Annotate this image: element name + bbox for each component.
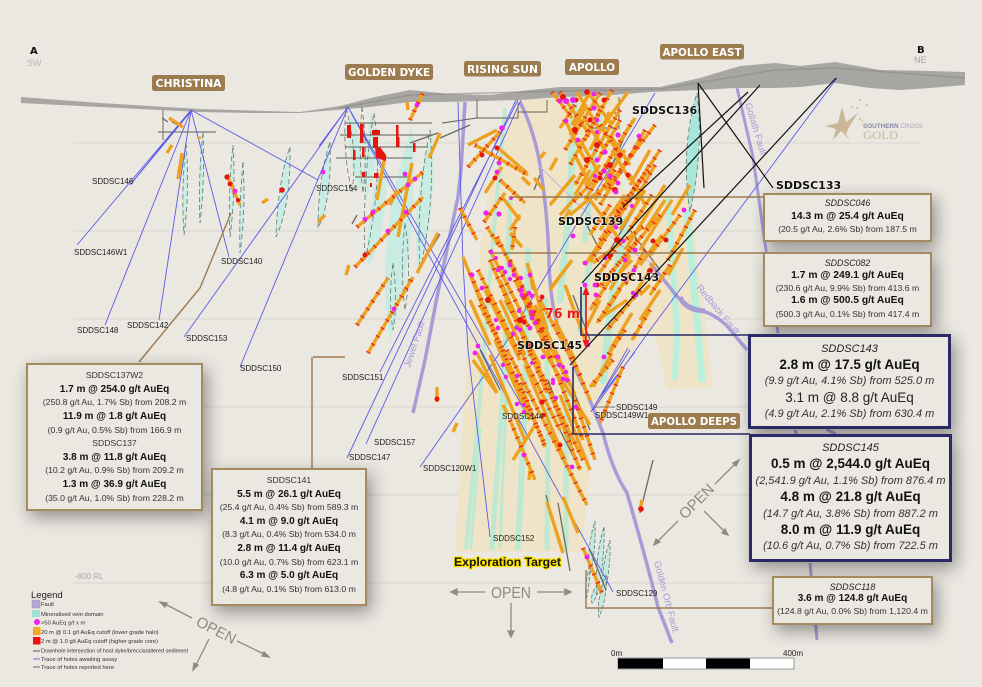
small drill hole labels: SDDSC140: [221, 257, 263, 266]
callout: SDDSC141: 5.5 m @ 26.1 g/t AuEq: [237, 489, 341, 500]
exploration target label: Exploration Target: [454, 555, 561, 569]
callout: SDDSC137W2 and SDDSC137: (10.2 g/t Au, 0.9% Sb) from 209.2 m: [45, 465, 184, 475]
legend: >50 AuEq g/t x m: [41, 620, 85, 626]
legend: Legend: [31, 590, 63, 601]
logo: Southern Cross Gold: [825, 99, 924, 142]
callout: SDDSC141: 2.8 m @ 11.4 g/t AuEq: [237, 543, 341, 554]
surface topography: [21, 62, 965, 113]
scale bar: [611, 649, 803, 669]
callout: SDDSC137W2 and SDDSC137: (250.8 g/t Au, 1.7% Sb) from 208.2 m: [43, 397, 186, 407]
bold drill hole labels: SDDSC136: [632, 104, 697, 117]
callout: SDDSC046: SDDSC046: [825, 198, 870, 208]
tag: Rising Sun: RISING SUN: [467, 64, 538, 76]
callout: SDDSC141: [211, 468, 367, 606]
faults: [413, 88, 836, 643]
callout: SDDSC143: SDDSC143: [821, 343, 878, 355]
open arrows: right: [654, 460, 739, 545]
bold drill hole labels: [517, 104, 841, 352]
legend: 2 m @ 1.0 g/t AuEq cutoff (higher grade core): [41, 639, 158, 645]
callout: SDDSC137W2 and SDDSC137: 1.3 m @ 36.9 g/t AuEq: [63, 479, 166, 490]
open arrows: centre: OPEN: [491, 585, 531, 602]
callout: SDDSC143: 2.8 m @ 17.5 g/t AuEq: [779, 357, 920, 372]
drill traces: thin grey collar lines: [158, 97, 620, 177]
open arrows: right: OPEN: [676, 481, 718, 523]
downhole intersection grey traces: [162, 118, 660, 590]
small drill hole labels: SDDSC146W1: [74, 248, 128, 257]
mineralised vein domains: Christina and Golden Dyke: [183, 93, 699, 330]
section ends A and B: SW: [27, 58, 42, 68]
callout: SDDSC137W2 and SDDSC137: SDDSC137: [92, 438, 137, 448]
small drill hole labels: SDDSC146: [92, 177, 134, 186]
small drill hole labels: [74, 177, 658, 598]
small drill hole labels: SDDSC149: [616, 403, 658, 412]
callout: SDDSC145: (14.7 g/t Au, 3.8% Sb) from 887.2 m: [763, 508, 938, 520]
pale vein domains: Golden Dyke: [349, 110, 433, 342]
redback fault: [650, 263, 747, 350]
callout: SDDSC137W2 and SDDSC137: 1.7 m @ 254.0 g/t AuEq: [60, 384, 169, 395]
fault labels: Golden Orb Fault: [651, 560, 681, 634]
deep vein domain cluster: [586, 521, 610, 617]
callout: SDDSC145: (2,541.9 g/t Au, 1.1% Sb) from 876.4 m: [756, 475, 945, 487]
tag: Apollo: APOLLO: [569, 62, 615, 74]
legend: Mineralised vein domain: [41, 612, 104, 618]
zone tags: [152, 44, 744, 429]
section ends A and B: [27, 45, 927, 68]
bold drill hole labels: SDDSC143: [594, 271, 659, 284]
callout: SDDSC137W2 and SDDSC137: 11.9 m @ 1.8 g/t AuEq: [63, 411, 166, 422]
tag: Golden Dyke: GOLDEN DYKE: [348, 67, 430, 79]
tag: Apollo: [565, 59, 619, 75]
open arrows: centre: [451, 585, 571, 637]
small drill hole labels: SDDSC151: [342, 373, 384, 382]
callout: SDDSC145: 0.5 m @ 2,544.0 g/t AuEq: [771, 456, 930, 471]
mineralised mint streaks: [466, 100, 625, 548]
callout: SDDSC141: 6.3 m @ 5.0 g/t AuEq: [240, 570, 338, 581]
small drill hole labels: SDDSC120W1: [423, 464, 477, 473]
callout: SDDSC141: SDDSC141: [267, 475, 311, 485]
bold drill hole labels: SDDSC139: [558, 215, 623, 228]
small drill hole labels: SDDSC153: [186, 334, 228, 343]
small drill hole labels: SDDSC154: [316, 184, 358, 193]
callout: SDDSC046: (20.5 g/t Au, 2.6% Sb) from 187.5 m: [778, 224, 917, 234]
legend: Trace of holes awaiting assay: [41, 657, 117, 663]
tag: Christina: [152, 75, 225, 91]
callout: SDDSC145: [749, 434, 952, 562]
logo: Southern Cross Gold: GOLD: [863, 128, 898, 142]
tag: Apollo East: APOLLO EAST: [662, 47, 742, 59]
legend: Trace of holes reported here: [41, 665, 114, 671]
fault labels: Goliath Fault: [742, 102, 769, 157]
callout: SDDSC143: [748, 334, 951, 429]
small drill hole labels: SDDSC129: [616, 589, 658, 598]
callout: SDDSC137W2 and SDDSC137: (0.9 g/t Au, 0.5% Sb) from 166.9 m: [48, 425, 181, 435]
callout: SDDSC143: 3.1 m @ 8.8 g/t AuEq: [785, 390, 914, 405]
minor fault: [538, 165, 650, 262]
section ends A and B: A: [30, 46, 38, 57]
small drill hole labels: SDDSC148: [77, 326, 119, 335]
small drill hole labels: SDDSC152: [493, 534, 535, 543]
holes awaiting assay: blue traces: [77, 78, 837, 592]
callout: SDDSC046: [763, 193, 932, 242]
high grade red blobs: [224, 89, 668, 512]
legend: Fault: [41, 602, 54, 608]
callout: SDDSC145: 4.8 m @ 21.8 g/t AuEq: [780, 489, 921, 504]
leader: SDDSC149: [595, 406, 615, 408]
small drill hole labels: SDDSC149W1: [595, 411, 649, 420]
bold drill hole labels: SDDSC145: [517, 339, 582, 352]
callout: SDDSC118: SDDSC118: [830, 582, 875, 592]
legend: Downhole intersection of host dyke/breccia/altered sediment: [41, 648, 188, 654]
small drill hole labels: SDDSC157: [374, 438, 416, 447]
callout: SDDSC137W2 and SDDSC137: 3.8 m @ 11.8 g/t AuEq: [63, 452, 166, 463]
RL grid lines: [73, 143, 922, 583]
logo: Southern Cross Gold: SOUTHERN CROSS: [863, 123, 924, 130]
section ends A and B: B: [917, 45, 925, 56]
callout: SDDSC145: (10.6 g/t Au, 0.7% Sb) from 722.5 m: [763, 540, 938, 552]
mineralised intersections: orange halo segments: [167, 90, 695, 593]
legend: 20 m @ 0.1 g/t AuEq cutoff (lower grade halo): [41, 630, 159, 636]
callout: SDDSC137W2 and SDDSC137: [26, 363, 203, 511]
jewel fault: [413, 102, 465, 413]
tag: Rising Sun: [464, 61, 541, 76]
tag: Apollo Deeps: APOLLO DEEPS: [651, 416, 737, 428]
callout: SDDSC118: (124.8 g/t Au, 0.0% Sb) from 1,120.4 m: [777, 606, 928, 616]
small drill hole labels: SDDSC147: [349, 453, 391, 462]
bold drill hole labels: SDDSC133: [776, 179, 841, 192]
legend: [31, 590, 188, 671]
tag: Christina: CHRISTINA: [156, 78, 222, 90]
small drill hole labels: SDDSC144: [502, 412, 544, 421]
callout: SDDSC141: (25.4 g/t Au, 0.4% Sb) from 589.3 m: [220, 502, 358, 512]
callout: SDDSC082: 1.7 m @ 249.1 g/t AuEq: [791, 270, 904, 281]
callout: SDDSC046: 14.3 m @ 25.4 g/t AuEq: [791, 211, 904, 222]
callout: SDDSC082: 1.6 m @ 500.5 g/t AuEq: [791, 295, 904, 306]
callout: SDDSC141: (8.3 g/t Au, 0.4% Sb) from 534.0 m: [222, 529, 356, 539]
RL label: -800 RL: [75, 572, 104, 581]
callout: SDDSC141: (10.0 g/t Au, 0.7% Sb) from 623.1 m: [220, 557, 358, 567]
fault labels: Redback Fault: [694, 283, 742, 337]
callout: SDDSC082: (500.3 g/t Au, 0.1% Sb) from 417.4 m: [776, 309, 919, 319]
fault labels: Jewel Fault: [402, 319, 428, 369]
callout: SDDSC082: (230.6 g/t Au, 9.9% Sb) from 413.6 m: [776, 283, 919, 293]
fault labels: [402, 102, 769, 634]
callout: SDDSC137W2 and SDDSC137: SDDSC137W2: [86, 370, 143, 380]
scale bar: 400m: [783, 649, 803, 658]
callout: SDDSC141: (4.8 g/t Au, 0.1% Sb) from 613.0 m: [222, 584, 356, 594]
exploration target zone: [455, 96, 713, 552]
callout: SDDSC082: [763, 252, 932, 327]
76 m red arrow: [545, 286, 590, 349]
higher grade core: red ticks along the orange segments: [227, 90, 695, 593]
callout: SDDSC143: (9.9 g/t Au, 4.1% Sb) from 525.0 m: [765, 375, 934, 387]
76 m red arrow: 76 m: [545, 307, 580, 322]
callout: SDDSC143: (4.9 g/t Au, 2.1% Sb) from 630.4 m: [765, 408, 934, 420]
scale bar: 0m: [611, 649, 622, 658]
goliath fault: [737, 88, 817, 640]
callout: SDDSC118: 3.6 m @ 124.8 g/t AuEq: [798, 593, 907, 604]
open arrows: left: [160, 602, 269, 670]
callout: SDDSC141: 4.1 m @ 9.0 g/t AuEq: [240, 516, 338, 527]
small drill hole labels: SDDSC142: [127, 321, 169, 330]
section ends A and B: NE: [914, 55, 927, 65]
black drill traces: [570, 78, 836, 365]
callout: SDDSC082: SDDSC082: [825, 258, 870, 268]
open arrows: left: OPEN: [193, 613, 239, 648]
golden orb fault: [520, 102, 672, 643]
high grade magenta dots: [233, 92, 686, 559]
callout: SDDSC145: 8.0 m @ 11.9 g/t AuEq: [781, 522, 920, 537]
callout: SDDSC137W2 and SDDSC137: (35.0 g/t Au, 1.0% Sb) from 228.2 m: [45, 493, 184, 503]
leader lines to callouts: [139, 197, 772, 608]
callout: SDDSC145: SDDSC145: [822, 442, 879, 454]
callout: SDDSC118: [772, 576, 933, 625]
small drill hole labels: SDDSC150: [240, 364, 282, 373]
